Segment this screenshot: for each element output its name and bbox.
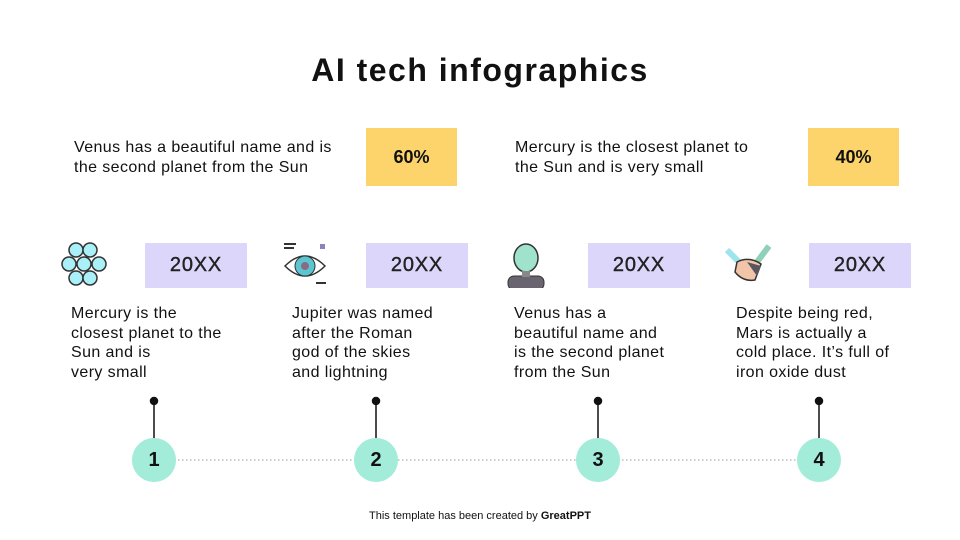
text block 1: Mercury is the — [71, 305, 177, 322]
text block 4: cold place. It’s full of — [736, 344, 889, 361]
step 3 — [576, 438, 620, 482]
text block 2: god of the skies — [292, 344, 410, 361]
text block 1: closest planet to the — [71, 325, 222, 342]
date box 3 — [588, 243, 690, 288]
stat box: 60%: 60% — [393, 146, 430, 166]
text block: top right: Mercury is the closest planet to — [515, 139, 748, 156]
date box 3: 20XX — [613, 254, 665, 276]
date box 4: 20XX — [834, 254, 886, 276]
text block: top left — [74, 139, 332, 176]
timeline — [150, 396, 824, 460]
text block 4: iron oxide dust — [736, 364, 846, 381]
step 1: 1 — [148, 448, 160, 470]
icon: eye — [284, 243, 326, 284]
text block 3: from the Sun — [514, 364, 610, 381]
icon: network — [61, 242, 107, 286]
text block 3 — [514, 305, 664, 381]
text block 4 — [736, 305, 889, 381]
date box 1: 20XX — [170, 254, 222, 276]
date box 1 — [145, 243, 247, 288]
text block 4: Mars is actually a — [736, 325, 867, 342]
stat box: 40% — [808, 128, 899, 186]
text block 3: beautiful name and — [514, 325, 657, 342]
text block: top right — [515, 139, 748, 176]
text block: top left: the second planet from the Sun — [74, 159, 308, 176]
text block 4: Despite being red, — [736, 305, 873, 322]
step 4 — [797, 438, 841, 482]
step 2: 2 — [370, 448, 382, 470]
date box 2: 20XX — [391, 254, 443, 276]
text block 1: Sun and is — [71, 344, 151, 361]
text block 3: is the second planet — [514, 344, 664, 361]
step 1 — [132, 438, 176, 482]
icon: handshake — [725, 244, 771, 282]
date box 4 — [809, 243, 911, 288]
step 4: 4 — [813, 448, 825, 470]
text block: top left: Venus has a beautiful name and is — [74, 139, 332, 156]
text block 2 — [292, 305, 433, 381]
stat box: 60% — [366, 128, 457, 186]
date box 2 — [366, 243, 468, 288]
text block 2: after the Roman — [292, 325, 413, 342]
footer: This template has been created by GreatPPT — [369, 510, 591, 522]
title: AI tech infographics — [311, 52, 649, 88]
text block 3: Venus has a — [514, 305, 606, 322]
icon: robot — [508, 243, 544, 288]
stat box: 40%: 40% — [835, 146, 872, 166]
text block 2: Jupiter was named — [292, 305, 433, 322]
text block 2: and lightning — [292, 364, 388, 381]
text block: top right: the Sun and is very small — [515, 159, 704, 176]
text block 1 — [71, 305, 222, 381]
step 2 — [354, 438, 398, 482]
text block 1: very small — [71, 364, 147, 381]
step 3: 3 — [592, 448, 604, 470]
